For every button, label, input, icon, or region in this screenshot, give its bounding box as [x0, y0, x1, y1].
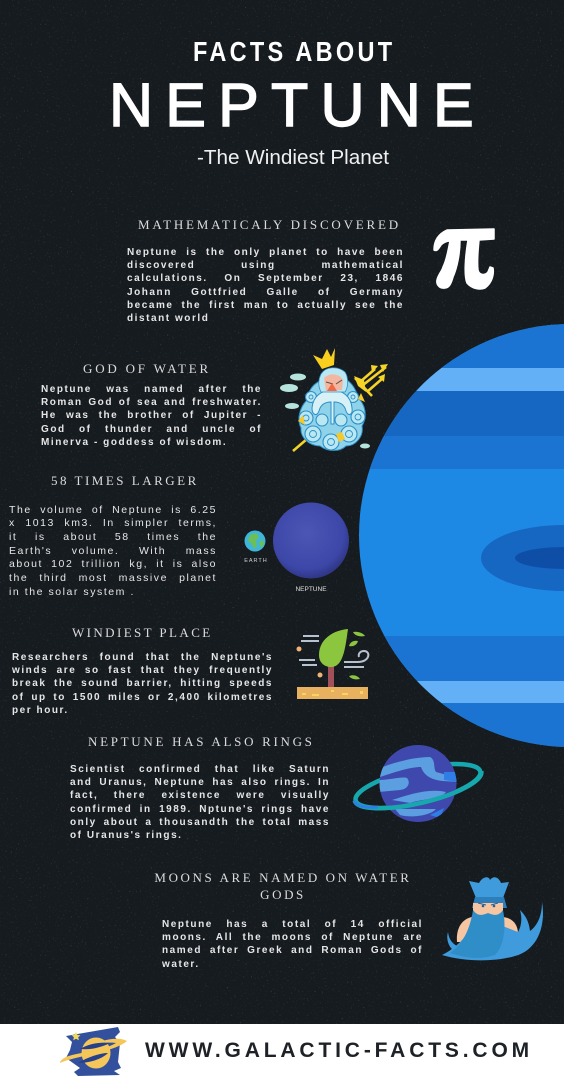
- heading: MOONS ARE NAMED ON WATER: [154, 870, 412, 885]
- body text: per hour.: [12, 705, 69, 716]
- icon: Neptune god with trident: [280, 348, 388, 452]
- heading: GOD OF WATER: [83, 361, 211, 376]
- beard: [299, 378, 365, 450]
- body text: Earth's volume. With mass: [9, 545, 217, 557]
- body text: in the solar system .: [9, 586, 135, 598]
- face: [473, 903, 503, 916]
- body text: only about a thousandth the total mass: [70, 817, 330, 828]
- body text: x 1013 km3. In simpler terms,: [9, 517, 217, 529]
- icon: ringed planet: [352, 745, 484, 822]
- body text: [70, 764, 330, 841]
- body text: calculations. On September 23, 1846: [127, 273, 404, 284]
- heading: [154, 870, 412, 902]
- cape: [442, 902, 543, 960]
- body text: Minerva - goddess of wisdom.: [41, 437, 227, 448]
- heading: GODS: [260, 887, 306, 902]
- body text: Neptune is the only planet to have been: [127, 247, 404, 258]
- icon: wind blowing tree: [296, 629, 370, 699]
- crown: [469, 877, 509, 898]
- body text: distant world: [127, 313, 209, 324]
- title: Neptune: NEPTUNE: [109, 71, 486, 139]
- website URL: WWW.GALACTIC-FACTS.COM: [145, 1039, 533, 1062]
- body text: Scientist confirmed that like Saturn: [70, 764, 330, 775]
- icon: pi: [433, 228, 495, 290]
- crown: [313, 348, 335, 369]
- body text: Roman God of sea and freshwater.: [41, 397, 262, 408]
- body text: Researchers found that the Neptune's: [12, 652, 273, 663]
- body text: discovered using mathematical: [127, 260, 404, 271]
- body text: The volume of Neptune is 6.25: [9, 504, 217, 516]
- body text: Neptune has a total of 14 official: [162, 919, 423, 930]
- Earth: EARTH: [244, 558, 268, 564]
- body text: the third most massive planet: [9, 572, 217, 584]
- body text: about 102 trillion kg, it is also: [9, 558, 217, 570]
- body text: water.: [162, 959, 200, 970]
- body text: and Uranus, Neptune has also rings. In: [70, 777, 330, 788]
- body text: confirmed in 1989. Nptune's rings have: [70, 804, 330, 815]
- body text: He was the brother of Jupiter -: [41, 410, 262, 421]
- chart: Earth vs Neptune size comparison: [244, 502, 349, 593]
- body text: [127, 247, 404, 324]
- body text: break the sound barrier, hitting speeds: [12, 678, 273, 689]
- hair and face: [319, 368, 348, 392]
- body text: named after Greek and Roman Gods of: [162, 945, 423, 956]
- body text: of Uranus's rings.: [70, 830, 183, 841]
- hair band: [472, 897, 507, 908]
- section: 58 times larger: [9, 473, 217, 598]
- planet Neptune illustration: [359, 324, 564, 747]
- body text: winds are so fast that they frequently: [12, 665, 273, 676]
- section: windiest place: [12, 625, 273, 716]
- body text: God of thunder and uncle of: [41, 424, 262, 435]
- icon: bearded sea god: [442, 877, 543, 960]
- heading: MATHEMATICALY DISCOVERED: [138, 217, 401, 232]
- body text: it is about 58 times the: [9, 531, 217, 543]
- subtitle: -The Windiest Planet: [197, 146, 389, 169]
- body text: [162, 919, 423, 970]
- logo: [60, 1027, 127, 1076]
- inner curls: [303, 395, 361, 446]
- body text: of up to 1500 miles or 2,400 kilometres: [12, 692, 273, 703]
- section: mathematically discovered: [127, 217, 404, 324]
- shoulders: [457, 917, 518, 942]
- beard: [450, 910, 504, 958]
- body text: Neptune was named after the: [41, 384, 262, 395]
- body text: [9, 504, 217, 598]
- gold ornaments: [298, 393, 365, 442]
- section: moons: [154, 870, 423, 970]
- Neptune: NEPTUNE: [295, 586, 327, 593]
- trident: [355, 367, 386, 396]
- footer band: [0, 1024, 564, 1081]
- body text: [12, 652, 273, 716]
- body text: [41, 384, 262, 448]
- section: god of water: [41, 361, 262, 448]
- fish: [280, 374, 370, 448]
- body text: fact, there existence were visually: [70, 790, 330, 801]
- heading: WINDIEST PLACE: [72, 625, 213, 640]
- title: facts about: FACTS ABOUT: [193, 36, 395, 67]
- body text: moons. All the moons of Neptune are: [162, 932, 423, 943]
- body text: Johann Gottfried Galle of Germany: [127, 287, 404, 298]
- spear: [293, 439, 307, 451]
- heading: 58 TIMES LARGER: [51, 473, 199, 488]
- moustache: [312, 390, 352, 424]
- heading: NEPTUNE HAS ALSO RINGS: [88, 734, 315, 749]
- section: Neptune has also rings: [70, 734, 330, 841]
- body text: became the first man to actually see the: [127, 300, 404, 311]
